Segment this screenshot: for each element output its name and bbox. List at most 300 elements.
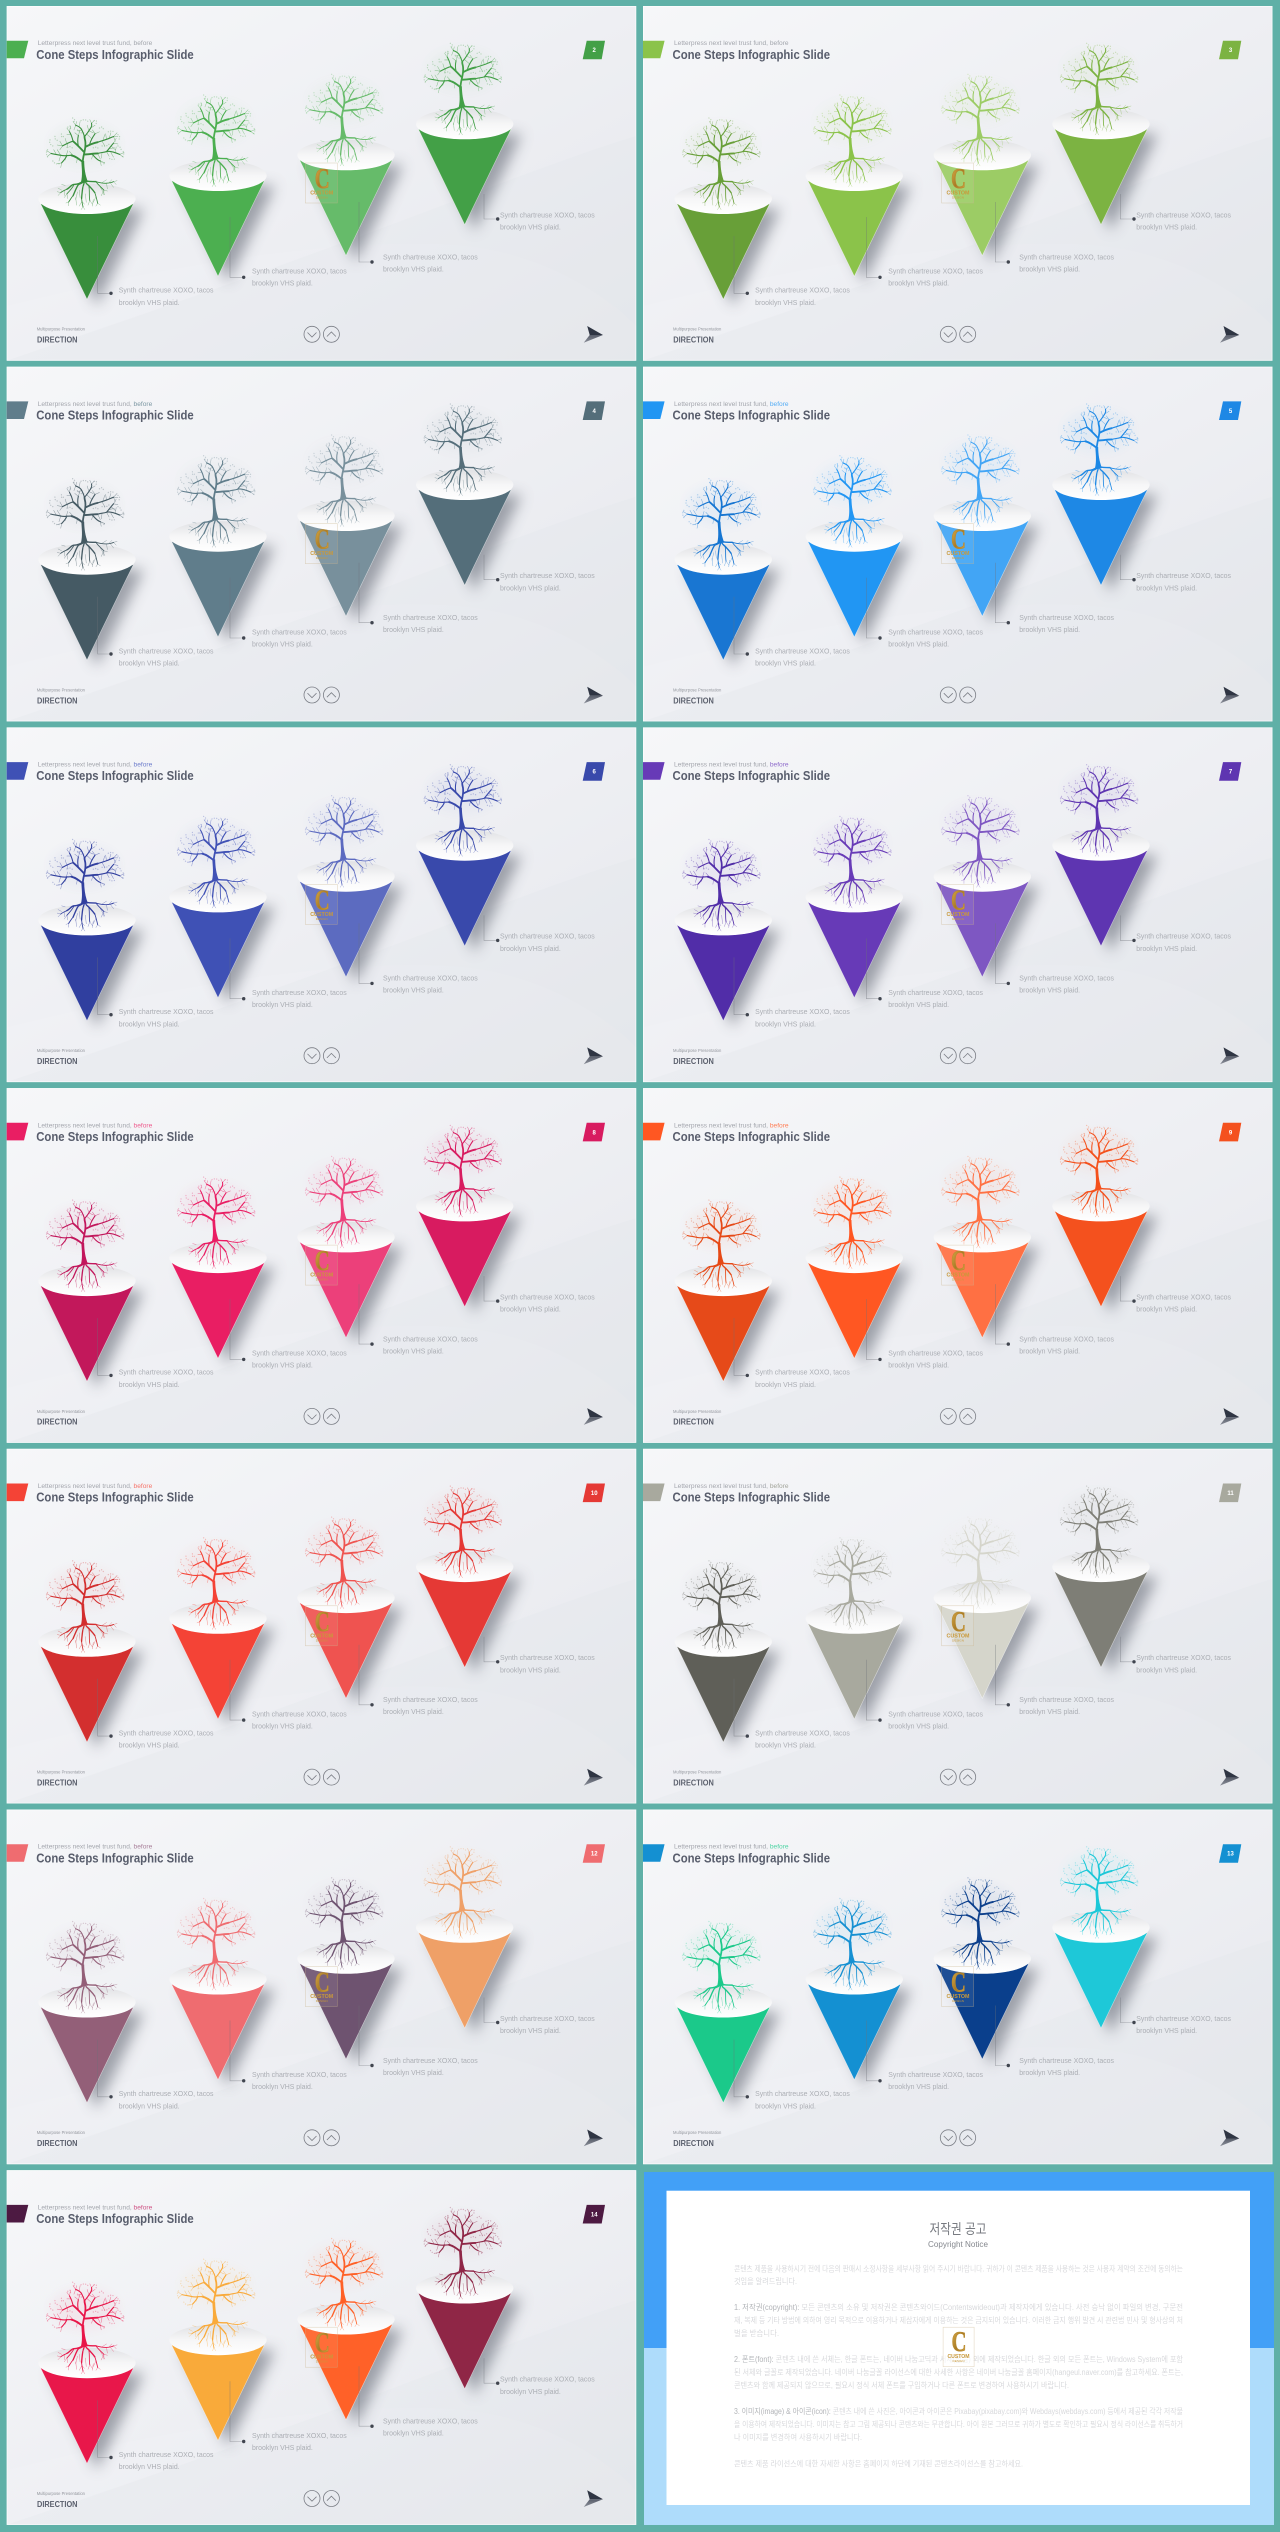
cone step 4 [1052, 1847, 1158, 2034]
cone step 3 [297, 2238, 403, 2426]
leader lines [734, 555, 1136, 656]
label 4 line 2: brooklyn VHS plaid. [500, 2026, 561, 2035]
footer presentation label: Multipurpose Presentation [37, 2130, 85, 2136]
cone step 2 [169, 95, 275, 283]
label 2: Synth chartreuse XOXO, tacos [888, 267, 983, 276]
paragraph 2: font: 콘텐츠와 함께 제공되지 않으므로, 필요시 정식 서체 폰트를 구입하거나 다른 폰트로 변경하여 사용하시기 바랍니다. [734, 2380, 1069, 2390]
footer presentation label: Multipurpose Presentation [673, 687, 722, 693]
label 3: Synth chartreuse XOXO, tacos [383, 2056, 478, 2065]
cone step 2 [806, 455, 911, 643]
label 2: Synth chartreuse XOXO, tacos [252, 1709, 347, 1718]
paragraph 3: image and icon: 을 이용하여 제작되었습니다. 이미지는 참고 그림 제공되나 콘텐츠와는 무관합니다. 아이 원본 그러므로 귀하가 별도로 확인하고 필요시 정식 라이선스를 취득하거 [734, 2419, 1183, 2429]
page number tag: 9 [1229, 1130, 1233, 1136]
nav arrows [304, 2490, 339, 2506]
cone step 4 [416, 764, 522, 952]
cone step 2 [806, 1538, 911, 1726]
footer presentation label: Multipurpose Presentation [37, 327, 85, 333]
slide 8: deep orange [643, 1088, 1272, 1443]
page number tag: 5 [1229, 409, 1233, 415]
label 3 line 2: brooklyn VHS plaid. [383, 1346, 444, 1355]
watermark: CUSTOM [946, 190, 970, 196]
cone step 1 [675, 1200, 780, 1388]
label 2 line 2: brooklyn VHS plaid. [888, 1361, 949, 1370]
cone step 3 [297, 435, 403, 623]
cone step 4 [1052, 404, 1158, 592]
slide 7: pink [7, 1088, 636, 1443]
cone step 4 [416, 1847, 522, 2034]
icon: paper plane [584, 687, 603, 704]
cone step 2 [169, 1177, 275, 1365]
page number tag: 8 [593, 1130, 597, 1136]
page number tag [583, 1123, 605, 1141]
label 4 line 2: brooklyn VHS plaid. [500, 944, 561, 953]
label 4 line 2: brooklyn VHS plaid. [1136, 583, 1197, 592]
label 2: Synth chartreuse XOXO, tacos [252, 2070, 347, 2079]
label 3 line 2: brooklyn VHS plaid. [383, 625, 444, 634]
cone step 3 [934, 795, 1039, 983]
icon: paper plane [584, 326, 603, 343]
slide 1: green [7, 6, 636, 361]
page number tag [1219, 1123, 1241, 1141]
cone step 2 [169, 455, 275, 643]
title: Cone Steps Infographic Slide [36, 1130, 194, 1144]
label 1 line 2: brooklyn VHS plaid. [119, 659, 180, 668]
white notice card [666, 2191, 1250, 2505]
watermark [305, 2327, 337, 2367]
header stripe [7, 401, 28, 419]
icon: paper plane [1220, 1408, 1239, 1425]
footer direction label: DIRECTION [673, 1778, 714, 1787]
cone step 3 [934, 435, 1039, 623]
cone step 4 [416, 2207, 522, 2395]
watermark [305, 1606, 337, 1646]
page number tag [1219, 401, 1241, 420]
cone step 1 [38, 1921, 144, 2109]
watermark: DESIGN [316, 556, 328, 560]
watermark: C [315, 524, 330, 556]
page number tag [583, 1484, 605, 1502]
label 1: Synth chartreuse XOXO, tacos [119, 1728, 214, 1737]
watermark: C [951, 1606, 966, 1638]
title: Cone Steps Infographic Slide [36, 2212, 194, 2226]
footer presentation label: Multipurpose Presentation [37, 1409, 85, 1415]
watermark: DESIGN [316, 1278, 328, 1282]
nav arrows [940, 687, 976, 703]
label 3: Synth chartreuse XOXO, tacos [383, 2416, 478, 2425]
label 2 line 2: brooklyn VHS plaid. [888, 2082, 949, 2091]
slide 3: blue grey [7, 367, 636, 721]
footer direction label: DIRECTION [37, 336, 78, 345]
label 1 line 2: brooklyn VHS plaid. [755, 2101, 816, 2110]
label 3 line 2: brooklyn VHS plaid. [1019, 1346, 1080, 1355]
label 4 line 2: brooklyn VHS plaid. [500, 1665, 561, 1674]
cone step 3 [297, 1878, 403, 2066]
label 1: Synth chartreuse XOXO, tacos [755, 2089, 850, 2098]
label 2 line 2: brooklyn VHS plaid. [888, 1721, 949, 1730]
watermark [942, 163, 974, 203]
label 4: Synth chartreuse XOXO, tacos [500, 1292, 595, 1301]
leader lines [98, 194, 499, 295]
label 4: Synth chartreuse XOXO, tacos [500, 210, 595, 219]
label 4 line 2: brooklyn VHS plaid. [1136, 1305, 1197, 1314]
subtitle: Letterpress next level trust fund, before [38, 40, 153, 47]
label 1: Synth chartreuse XOXO, tacos [755, 1007, 850, 1016]
watermark: CUSTOM [310, 551, 333, 557]
watermark: C [315, 163, 330, 195]
slide 2: light green [643, 6, 1272, 361]
label 4: Synth chartreuse XOXO, tacos [500, 2014, 595, 2023]
watermark: C [951, 163, 966, 195]
watermark: C [315, 1245, 330, 1277]
cone step 2 [169, 1898, 275, 2086]
page number tag: 7 [1229, 770, 1233, 776]
label 2 line 2: brooklyn VHS plaid. [252, 1361, 313, 1370]
cone step 2 [169, 816, 275, 1004]
label 4: Synth chartreuse XOXO, tacos [500, 571, 595, 580]
footer direction label: DIRECTION [673, 1418, 714, 1427]
watermark: C [315, 1606, 330, 1638]
footer direction label: DIRECTION [37, 2139, 78, 2148]
label 4 line 2: brooklyn VHS plaid. [500, 2387, 561, 2396]
label 3 line 2: brooklyn VHS plaid. [1019, 986, 1080, 995]
paragraph 1: copyright: 재, 복제 등 기타 방법에 의하여 영리 목적으로 이용하거나 제삼자에게 이용하는 것은 금지되어 있습니다. 이러한 금지 행위 발견 시 관련법 민사 및 형사상의 처 [734, 2315, 1183, 2325]
watermark: C [315, 2327, 330, 2359]
paragraph 3: image and icon: 3. 이미지(image) & 아이콘(icon): 콘텐츠 내에 쓴 사진은, 아이콘과 아이콘은 Pixabay(pixabay.com)와 Webdays(webdays.com) 등에서 제공된 각각 저작물 [734, 2406, 1183, 2416]
nav arrows [940, 1769, 976, 1785]
cone step 1 [675, 839, 780, 1027]
page number tag: 12 [591, 1852, 598, 1858]
watermark [943, 2326, 974, 2367]
footer direction label: DIRECTION [37, 1057, 78, 1066]
page number tag [583, 1844, 605, 1863]
watermark [942, 884, 974, 924]
intro paragraph: 것임을 알려드립니다. [734, 2276, 797, 2286]
leader lines [734, 915, 1136, 1016]
label 3: Synth chartreuse XOXO, tacos [1019, 1695, 1114, 1704]
watermark [942, 1606, 974, 1646]
cone step 2 [806, 1177, 911, 1365]
subtitle: Letterpress next level trust fund, before [38, 2204, 153, 2211]
subtitle: Letterpress next level trust fund, before [38, 1122, 153, 1129]
label 4: Synth chartreuse XOXO, tacos [1136, 1653, 1231, 1662]
watermark: CUSTOM [310, 1994, 333, 2000]
slide 12: sea green and blue [643, 1810, 1272, 2164]
cone step 4 [416, 43, 522, 231]
page number tag [1219, 762, 1241, 781]
title: Cone Steps Infographic Slide [36, 1491, 194, 1505]
label 3: Synth chartreuse XOXO, tacos [383, 1695, 478, 1704]
subtitle: Letterpress next level trust fund, before [674, 1483, 789, 1490]
label 4 line 2: brooklyn VHS plaid. [1136, 944, 1197, 953]
cone step 2 [169, 1538, 275, 1726]
title: Cone Steps Infographic Slide [36, 409, 194, 423]
label 4: Synth chartreuse XOXO, tacos [1136, 2014, 1231, 2023]
label 3: Synth chartreuse XOXO, tacos [1019, 2056, 1114, 2065]
cone step 4 [1052, 1125, 1158, 1313]
footer direction label: DIRECTION [673, 1057, 714, 1066]
label 2: Synth chartreuse XOXO, tacos [252, 988, 347, 997]
label 3: Synth chartreuse XOXO, tacos [383, 1334, 478, 1343]
title: Cone Steps Infographic Slide [672, 48, 830, 62]
leader lines [98, 1276, 499, 1377]
subtitle: Letterpress next level trust fund, before [38, 1844, 153, 1851]
blue upper background [644, 2172, 1274, 2348]
header stripe [7, 1484, 28, 1501]
cone step 1 [38, 1200, 144, 1388]
title: Cone Steps Infographic Slide [672, 409, 830, 423]
label 2: Synth chartreuse XOXO, tacos [252, 1349, 347, 1358]
label 3: Synth chartreuse XOXO, tacos [383, 974, 478, 983]
page number tag: 10 [591, 1491, 598, 1497]
slide 4: blue [643, 367, 1272, 721]
label 1 line 2: brooklyn VHS plaid. [755, 298, 816, 307]
page number tag [1219, 1844, 1241, 1863]
label 2 line 2: brooklyn VHS plaid. [252, 1000, 313, 1009]
watermark: CUSTOM [948, 2354, 970, 2360]
page number tag [1219, 41, 1241, 59]
title: Cone Steps Infographic Slide [672, 1130, 830, 1144]
label 3: Synth chartreuse XOXO, tacos [383, 613, 478, 622]
label 3: Synth chartreuse XOXO, tacos [383, 252, 478, 261]
paragraph 1: copyright: 벌을 받습니다. [734, 2328, 779, 2338]
icon: paper plane [1220, 1769, 1239, 1786]
watermark: DESIGN [316, 1999, 328, 2003]
page number tag: 2 [593, 48, 597, 54]
footer presentation label: Multipurpose Presentation [673, 1048, 722, 1054]
footer direction label: DIRECTION [37, 2500, 78, 2509]
cone step 2 [806, 95, 911, 283]
cone step 3 [934, 1156, 1039, 1344]
paragraph 3: image and icon: 나 이미지를 변경하여 사용하시기 바랍니다. [734, 2432, 862, 2442]
label 3: Synth chartreuse XOXO, tacos [1019, 252, 1114, 261]
label 2: Synth chartreuse XOXO, tacos [888, 988, 983, 997]
label 1: Synth chartreuse XOXO, tacos [119, 1368, 214, 1377]
cone step 3 [297, 1156, 403, 1344]
cone step 4 [416, 1125, 522, 1313]
label 1 line 2: brooklyn VHS plaid. [119, 298, 180, 307]
icon: paper plane [1220, 1047, 1239, 1064]
watermark: DESIGN [316, 917, 328, 921]
watermark [942, 1245, 974, 1285]
label 2: Synth chartreuse XOXO, tacos [888, 2070, 983, 2079]
icon: paper plane [584, 2130, 603, 2146]
watermark: DESIGN [952, 917, 964, 921]
leader lines [98, 1637, 499, 1738]
watermark: C [951, 1966, 966, 1998]
page number tag [1219, 1484, 1241, 1502]
footer presentation label: Multipurpose Presentation [673, 1770, 722, 1776]
watermark: CUSTOM [946, 1994, 970, 2000]
watermark: CUSTOM [310, 2355, 333, 2361]
page number tag [583, 2205, 605, 2224]
header stripe [7, 41, 28, 58]
watermark: CUSTOM [946, 1273, 970, 1279]
notice title: 저작권 공고 [930, 2221, 987, 2237]
footer direction label: DIRECTION [673, 2139, 714, 2148]
nav arrows [940, 1048, 976, 1064]
page number tag: 14 [591, 2212, 598, 2218]
label 2 line 2: brooklyn VHS plaid. [252, 279, 313, 288]
label 4: Synth chartreuse XOXO, tacos [500, 2374, 595, 2383]
paragraph 2: font [734, 2354, 1184, 2390]
subtitle: Letterpress next level trust fund, before [38, 1483, 153, 1490]
cone step 4 [1052, 764, 1158, 952]
cone step 3 [934, 1517, 1039, 1705]
cone step 3 [934, 74, 1039, 262]
label 1: Synth chartreuse XOXO, tacos [755, 1728, 850, 1737]
label 1: Synth chartreuse XOXO, tacos [119, 286, 214, 295]
watermark: CUSTOM [946, 1633, 970, 1639]
page number tag [583, 762, 605, 781]
footer presentation label: Multipurpose Presentation [37, 1048, 85, 1054]
cone step 1 [38, 478, 144, 666]
nav arrows [304, 2130, 339, 2146]
page number tag [583, 401, 605, 420]
label 2 line 2: brooklyn VHS plaid. [252, 639, 313, 648]
cone step 1 [675, 1921, 780, 2109]
watermark: DESIGN [952, 1999, 964, 2003]
footer direction label: DIRECTION [37, 1778, 78, 1787]
label 2 line 2: brooklyn VHS plaid. [252, 1721, 313, 1730]
leader lines [734, 1637, 1136, 1738]
footer presentation label: Multipurpose Presentation [37, 2491, 85, 2497]
cone step 1 [38, 118, 144, 306]
label 1 line 2: brooklyn VHS plaid. [755, 1741, 816, 1750]
watermark: C [315, 1966, 330, 1998]
label 4: Synth chartreuse XOXO, tacos [500, 932, 595, 941]
watermark [942, 1966, 974, 2006]
watermark: DESIGN [952, 2359, 964, 2363]
watermark: CUSTOM [946, 551, 970, 557]
light blue lower background [644, 2348, 1274, 2525]
label 4 line 2: brooklyn VHS plaid. [1136, 2026, 1197, 2035]
slide 10: warm grey [643, 1449, 1272, 1804]
label 1: Synth chartreuse XOXO, tacos [119, 2450, 214, 2459]
label 4 line 2: brooklyn VHS plaid. [1136, 223, 1197, 232]
leader lines [734, 1276, 1136, 1377]
label 1 line 2: brooklyn VHS plaid. [119, 1019, 180, 1028]
nav arrows [304, 1769, 339, 1785]
nav arrows [304, 326, 339, 342]
label 1 line 2: brooklyn VHS plaid. [755, 1380, 816, 1389]
label 3 line 2: brooklyn VHS plaid. [383, 2068, 444, 2077]
paragraph 1: copyright: 1. 저작권(copyright): 모든 콘텐츠의 소유 및 저작권은 콘텐츠와이드(Contentswideout)과 제작자에게 있습니다. 사전 승낙 없이 파일의 변경, 구문전 [734, 2302, 1183, 2312]
cone step 2 [806, 1898, 911, 2086]
slide 11: coral and mauve [7, 1810, 636, 2164]
cone step 4 [1052, 43, 1158, 231]
page number tag: 6 [593, 770, 597, 776]
title: Cone Steps Infographic Slide [36, 1851, 194, 1865]
leader lines [734, 1998, 1136, 2098]
footer presentation label: Multipurpose Presentation [673, 2130, 722, 2136]
intro paragraph [734, 2264, 1183, 2286]
header stripe [643, 41, 665, 58]
cone step 2 [169, 2259, 275, 2447]
nav arrows [304, 1048, 339, 1064]
subtitle: Letterpress next level trust fund, before [674, 1844, 789, 1851]
title: Cone Steps Infographic Slide [672, 769, 830, 783]
cone step 4 [416, 404, 522, 592]
title: Cone Steps Infographic Slide [36, 769, 194, 783]
label 4 line 2: brooklyn VHS plaid. [500, 223, 561, 232]
watermark: C [952, 2326, 966, 2358]
label 2: Synth chartreuse XOXO, tacos [252, 2431, 347, 2440]
cone step 1 [38, 1561, 144, 1748]
watermark: CUSTOM [310, 190, 333, 196]
title: Cone Steps Infographic Slide [36, 48, 194, 62]
panel: copyright notice [644, 2172, 1274, 2525]
watermark: DESIGN [952, 196, 964, 200]
watermark: CUSTOM [310, 1633, 333, 1639]
icon: paper plane [1220, 2130, 1239, 2146]
label 3 line 2: brooklyn VHS plaid. [1019, 1707, 1080, 1716]
watermark: CUSTOM [946, 912, 970, 918]
label 3: Synth chartreuse XOXO, tacos [1019, 613, 1114, 622]
page number tag: 3 [1229, 48, 1233, 54]
watermark: C [951, 524, 966, 556]
leader lines [98, 2358, 499, 2459]
notice subtitle: Copyright Notice [928, 2239, 988, 2249]
cone step 3 [297, 795, 403, 983]
subtitle: Letterpress next level trust fund, before [38, 401, 153, 408]
label 2: Synth chartreuse XOXO, tacos [252, 267, 347, 276]
header stripe [643, 762, 665, 780]
label 3: Synth chartreuse XOXO, tacos [1019, 974, 1114, 983]
label 3 line 2: brooklyn VHS plaid. [383, 1707, 444, 1716]
cone step 3 [297, 74, 403, 262]
paragraph 3: image and icon [734, 2406, 1183, 2442]
label 4: Synth chartreuse XOXO, tacos [1136, 932, 1231, 941]
watermark: DESIGN [952, 556, 964, 560]
watermark [305, 1966, 337, 2006]
watermark: C [315, 884, 330, 916]
closing note: 콘텐츠 제품 라이선스에 대한 자세한 사항은 홈페이지 하단에 기재된 콘텐츠라이선스를 참고하세요. [734, 2458, 1023, 2468]
header stripe [7, 2205, 28, 2222]
footer direction label: DIRECTION [37, 1418, 78, 1427]
label 3 line 2: brooklyn VHS plaid. [383, 2428, 444, 2437]
cone step 3 [934, 1878, 1039, 2066]
label 2: Synth chartreuse XOXO, tacos [888, 1709, 983, 1718]
label 1: Synth chartreuse XOXO, tacos [119, 2089, 214, 2098]
footer presentation label: Multipurpose Presentation [673, 1409, 722, 1415]
watermark [942, 524, 974, 564]
watermark: CUSTOM [310, 912, 333, 918]
watermark [305, 524, 337, 564]
watermark: DESIGN [316, 196, 328, 200]
label 4: Synth chartreuse XOXO, tacos [500, 1653, 595, 1662]
label 1 line 2: brooklyn VHS plaid. [755, 1019, 816, 1028]
leader lines [734, 194, 1136, 295]
intro paragraph: 콘텐츠 제품을 사용하시기 전에 다음의 판매시 소정사항을 세부사항 읽어 주시기 바랍니다. 귀하가 이 콘텐츠 제품을 사용하는 것은 사용자 계약의 조건에 동의하는 [734, 2264, 1183, 2274]
cone step 3 [297, 1517, 403, 1705]
header stripe [7, 762, 28, 780]
label 1 line 2: brooklyn VHS plaid. [119, 2101, 180, 2110]
nav arrows [940, 326, 976, 342]
cone step 4 [416, 1486, 522, 1674]
label 2 line 2: brooklyn VHS plaid. [888, 279, 949, 288]
label 2: Synth chartreuse XOXO, tacos [252, 627, 347, 636]
label 3 line 2: brooklyn VHS plaid. [383, 264, 444, 273]
leader lines [98, 1998, 499, 2098]
page number tag: 4 [593, 409, 597, 415]
cone step 2 [806, 816, 911, 1004]
subtitle: Letterpress next level trust fund, before [674, 401, 789, 408]
page number tag: 11 [1227, 1491, 1234, 1497]
label 2 line 2: brooklyn VHS plaid. [252, 2082, 313, 2091]
paragraph 1: copyright [734, 2302, 1183, 2338]
watermark: CUSTOM [310, 1273, 333, 1279]
cone step 4 [1052, 1486, 1158, 1674]
